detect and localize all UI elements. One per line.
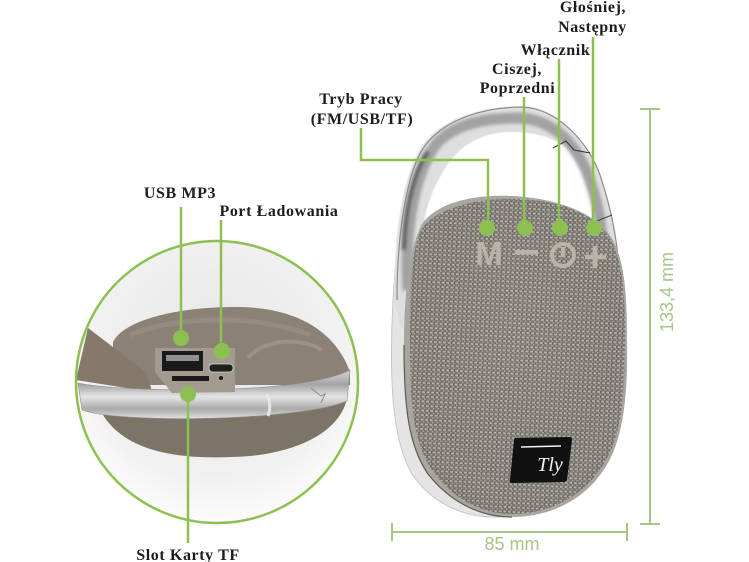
- metal ring: [78, 370, 350, 419]
- reset hole: [219, 376, 223, 380]
- lower fabric: [103, 398, 347, 457]
- callout: Tryb Pracy: Tryb Pracy: [319, 91, 403, 108]
- dimension: height: [640, 109, 677, 524]
- port plate: [155, 348, 235, 393]
- callout: Ciszej, Poprzedni: Ciszej,: [492, 61, 542, 78]
- callout: Tryb Pracy: [311, 91, 495, 236]
- detail circle: ports: [76, 241, 358, 523]
- fabric body: [410, 199, 625, 514]
- logo badge: Tly: [537, 454, 563, 476]
- callout: Wlacznik: Włącznik: [521, 42, 590, 59]
- fabric rim: [404, 196, 627, 517]
- callout: Port Ladowania: Port Ładowania: [219, 203, 339, 220]
- dimension: width: 85 mm: [484, 534, 540, 554]
- callout: Wlacznik: [521, 42, 590, 236]
- dimension: height: 133,4 mm: [657, 252, 677, 332]
- button: minus: [515, 250, 538, 254]
- logo badge: [510, 437, 572, 483]
- dimension: width: [392, 523, 627, 554]
- bottom view of speaker: [76, 307, 350, 457]
- micro USB port: [209, 364, 233, 372]
- speaker product photo: [391, 107, 627, 517]
- left flap: [76, 328, 152, 392]
- callout: Ciszej, Poprzedni: Poprzedni: [480, 80, 555, 97]
- callout: Tryb Pracy: (FM/USB/TF): [311, 111, 413, 128]
- circle outline: [76, 241, 358, 523]
- callout: USB MP3: USB MP3: [144, 185, 216, 202]
- upper body: [113, 307, 350, 385]
- TF slot: [172, 376, 209, 381]
- callout: Glosniej, Nastepny: Następny: [558, 19, 627, 36]
- button: mode M: M: [475, 235, 503, 272]
- button: power: [552, 244, 574, 266]
- callout: Slot Karty TF: [136, 386, 240, 562]
- callout: Ciszej, Poprzedni: [480, 61, 555, 236]
- callout: USB MP3: [144, 185, 216, 346]
- USB port: [162, 351, 203, 371]
- button: plus: [585, 246, 606, 268]
- carabiner clip: [394, 107, 618, 330]
- callout: Port Ladowania: [214, 203, 339, 359]
- outer white shell: [391, 240, 560, 517]
- callout: Glosniej, Nastepny: [558, 0, 627, 236]
